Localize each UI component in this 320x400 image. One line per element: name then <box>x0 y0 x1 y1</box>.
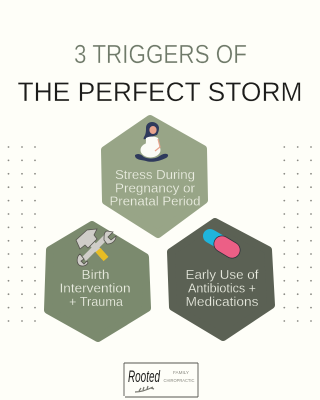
hexagon: bottom left <box>48 225 147 338</box>
dot grid: right <box>283 146 312 322</box>
icon: hammer and wrench <box>76 229 116 266</box>
text: birth intervention + trauma: Intervention <box>60 280 130 296</box>
text: birth intervention + trauma <box>60 267 130 309</box>
logo: rooted family chiropractic <box>124 363 198 397</box>
logo tagline: FAMILY <box>173 370 189 375</box>
title: the perfect storm: THE PERFECT STORM <box>18 77 302 107</box>
icon: meditating pregnant woman <box>135 122 168 162</box>
text: birth intervention + trauma: Birth <box>82 267 110 282</box>
text: birth intervention + trauma: + Trauma <box>69 294 124 309</box>
text: early use of antibiotics + medications: Medications <box>186 294 259 309</box>
panel: birth intervention <box>48 225 147 338</box>
hexagon: top <box>105 119 204 234</box>
logo frame <box>124 363 198 397</box>
text: early use of antibiotics + medications: Antibiotics + <box>188 280 256 296</box>
dot grid: left <box>8 146 36 322</box>
panel: stress during pregnancy <box>105 119 204 234</box>
logo tagline: CHIROPRACTIC <box>164 378 195 383</box>
hexagon: bottom right <box>171 222 271 337</box>
text: stress during pregnancy or prenatal period: Prenatal Period <box>110 194 200 208</box>
title: 3 triggers of: 3 TRIGGERS OF <box>74 39 247 69</box>
text: stress during pregnancy or prenatal period: Pregnancy or <box>115 180 196 196</box>
text: early use of antibiotics + medications: Early Use of <box>186 267 259 282</box>
icon: capsule pills <box>210 236 232 250</box>
logo wordmark: Rooted <box>128 367 160 386</box>
text: early use of antibiotics + medications <box>186 267 259 309</box>
text: stress during pregnancy or prenatal period: Stress During <box>115 167 195 182</box>
logo sprig <box>135 386 154 392</box>
text: stress during pregnancy or prenatal period <box>110 167 200 208</box>
panel: early use of antibiotics <box>171 222 271 337</box>
logo tagline <box>164 370 195 383</box>
